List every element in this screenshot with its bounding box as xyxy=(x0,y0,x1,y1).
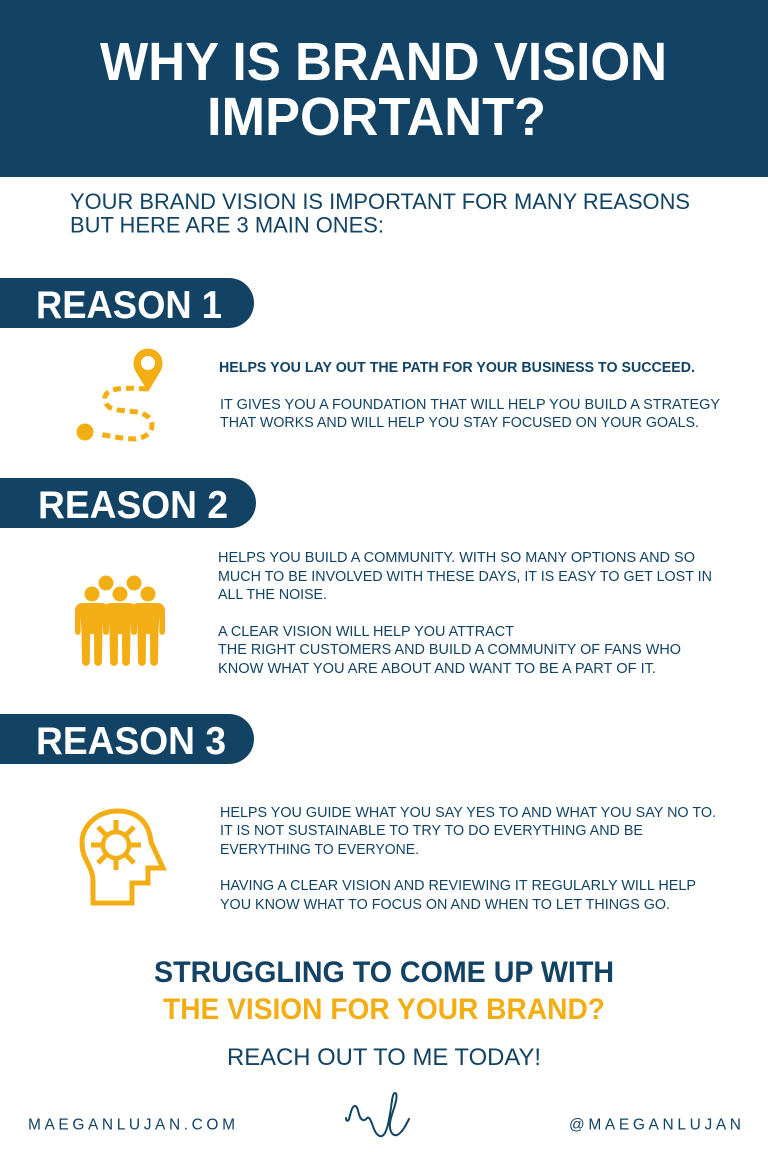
text: reason 3: YOU KNOW WHAT TO FOCUS ON AND WHEN TO LET THINGS GO. xyxy=(220,897,670,913)
heading: reason 1 xyxy=(0,278,254,328)
heading: reason 2: REASON 2 xyxy=(38,484,228,527)
logo: signature xyxy=(346,1093,409,1136)
intro text: YOUR BRAND VISION IS IMPORTANT FOR MANY REASONS xyxy=(70,189,690,214)
text: reason 2: ALL THE NOISE. xyxy=(218,587,327,603)
intro text xyxy=(70,189,690,238)
text: reason 3: EVERYTHING TO EVERYONE. xyxy=(220,842,419,858)
text: reason 1: HELPS YOU LAY OUT THE PATH FOR YOUR BUSINESS TO SUCCEED. xyxy=(219,360,695,376)
icon: group of people xyxy=(75,576,165,666)
title: WHY IS BRAND VISION xyxy=(100,32,667,92)
intro text: BUT HERE ARE 3 MAIN ONES: xyxy=(70,212,384,238)
call to action xyxy=(154,956,614,1071)
icon: head with gear xyxy=(82,811,163,903)
footer: social handle: @MAEGANLUJAN xyxy=(569,1116,741,1134)
footer: website: MAEGANLUJAN.COM xyxy=(28,1116,235,1134)
heading: reason 1: REASON 1 xyxy=(36,284,222,327)
heading: reason 2 xyxy=(0,478,256,528)
text: reason 2: HELPS YOU BUILD A COMMUNITY. WITH SO MANY OPTIONS AND SO xyxy=(218,550,695,566)
text: reason 2 xyxy=(218,550,712,677)
title: IMPORTANT? xyxy=(207,87,546,147)
icon: map route with pin xyxy=(76,348,162,440)
text: reason 1: THAT WORKS AND WILL HELP YOU STAY FOCUSED ON YOUR GOALS. xyxy=(220,415,699,431)
call to action: THE VISION FOR YOUR BRAND? xyxy=(163,993,605,1026)
text: reason 3 xyxy=(220,805,716,913)
heading: reason 3 xyxy=(0,714,254,764)
text: reason 1: IT GIVES YOU A FOUNDATION THAT WILL HELP YOU BUILD A STRATEGY xyxy=(220,397,720,413)
heading: reason 3: REASON 3 xyxy=(36,720,226,763)
text: reason 2: THE RIGHT CUSTOMERS AND BUILD A COMMUNITY OF FANS WHO xyxy=(218,642,681,658)
text: reason 3: HAVING A CLEAR VISION AND REVIEWING IT REGULARLY WILL HELP xyxy=(220,878,696,894)
title banner xyxy=(0,0,768,177)
text: reason 1 xyxy=(219,360,720,431)
text: reason 2: KNOW WHAT YOU ARE ABOUT AND WANT TO BE A PART OF IT. xyxy=(218,661,656,677)
text: reason 2: A CLEAR VISION WILL HELP YOU ATTRACT xyxy=(218,624,514,640)
text: reason 3: HELPS YOU GUIDE WHAT YOU SAY YES TO AND WHAT YOU SAY NO TO. xyxy=(220,805,716,821)
call to action: STRUGGLING TO COME UP WITH xyxy=(154,956,614,989)
text: reason 3: IT IS NOT SUSTAINABLE TO TRY TO DO EVERYTHING AND BE xyxy=(220,823,643,839)
call to action: REACH OUT TO ME TODAY! xyxy=(227,1044,541,1071)
text: reason 2: MUCH TO BE INVOLVED WITH THESE DAYS, IT IS EASY TO GET LOST IN xyxy=(218,569,712,585)
title xyxy=(100,32,667,147)
